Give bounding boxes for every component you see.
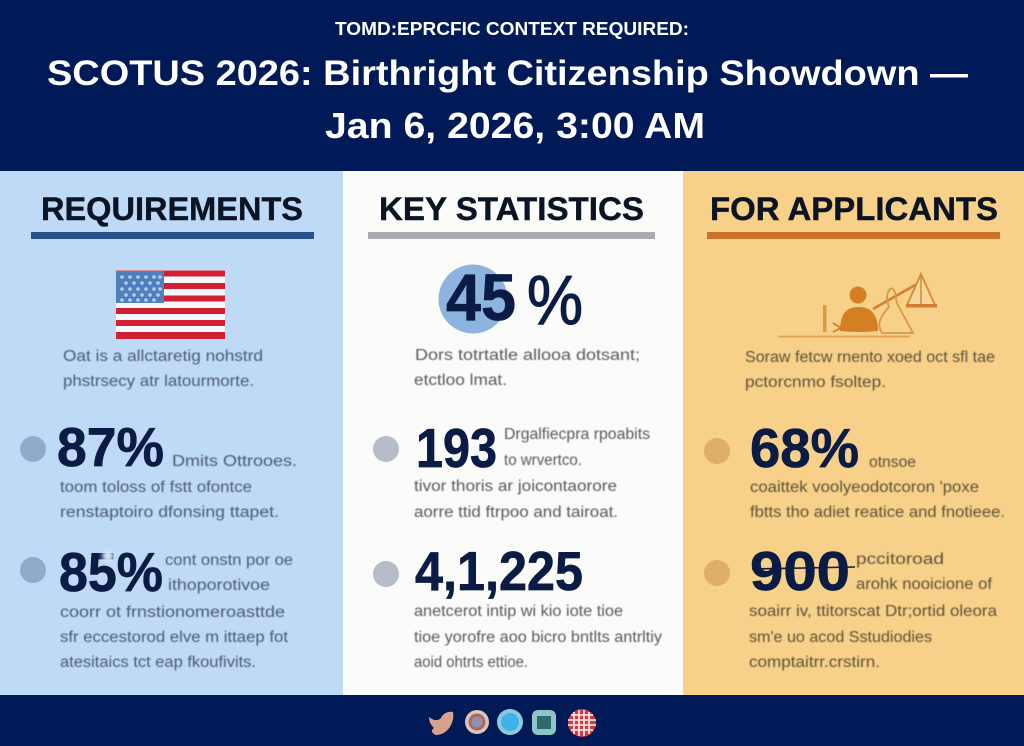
stat: 193: Drgalfiecpra rpoabits bbox=[504, 426, 650, 443]
for applicants intro text: pctorcnmo fsoltep. bbox=[745, 374, 886, 391]
icon: square badge bbox=[532, 710, 556, 735]
icon: flower badge bbox=[465, 710, 489, 734]
key statistics heading rule bbox=[368, 232, 655, 239]
stat: 4,1,225 bbox=[373, 540, 662, 671]
icon: bird bbox=[429, 712, 453, 735]
icon: blue circle bbox=[497, 709, 523, 735]
stat: 900: soairr iv, ttitorscat Dtr;ortid oleora bbox=[749, 603, 997, 620]
key statistics intro text: etctloo lmat. bbox=[414, 372, 507, 389]
stat: 85%: 85% bbox=[59, 541, 163, 603]
stat: 193: tivor thoris ar joicontaorore bbox=[414, 478, 617, 495]
45% hero figure: 45 bbox=[446, 260, 516, 334]
stat: 68% bbox=[704, 417, 1005, 521]
stat: 85% bbox=[20, 541, 293, 671]
stat: 193: 193 bbox=[416, 417, 497, 479]
stat: 4,1,225: 4,1,225 bbox=[415, 540, 583, 602]
stat: 85%: cont onstn por oe bbox=[165, 552, 293, 569]
stat: 4,1,225: anetcerot intip wi kio iote tioe bbox=[414, 603, 623, 620]
title: Jan 6, 2026, 3:00 AM bbox=[325, 105, 705, 146]
key statistics heading: KEY STATISTICS bbox=[379, 191, 644, 227]
stat: 900: 900 bbox=[750, 540, 850, 602]
stat: 87%: Dmits Ottrooes. bbox=[172, 453, 297, 470]
stat: 4,1,225: aoid ohtrts ettioe. bbox=[414, 654, 528, 671]
icon: red checked circle bbox=[568, 709, 596, 737]
for applicants heading rule bbox=[707, 232, 1000, 239]
stat: 87%: 87% bbox=[57, 416, 164, 478]
key statistics intro text: Dors totrtatle allooa dotsant; bbox=[415, 347, 640, 364]
stat: 68%: 68% bbox=[750, 417, 859, 479]
stat: 68%: coaittek voolyeodotcoron 'poxe bbox=[750, 479, 979, 496]
stat: 193: to wrvertco. bbox=[504, 452, 582, 469]
panel: requirements bbox=[0, 171, 343, 695]
stat: 68%: otnsoe bbox=[869, 454, 916, 471]
stat: 87%: renstaptoiro dfonsing ttapet. bbox=[60, 504, 279, 521]
header kicker: TOMD:EPRCFIC CONTEXT REQUIRED: bbox=[335, 19, 689, 39]
stat: 900 bbox=[704, 540, 997, 671]
stat: 193 bbox=[373, 417, 650, 521]
45% hero figure bbox=[438, 260, 583, 339]
for applicants intro text bbox=[745, 349, 995, 391]
requirements heading: REQUIREMENTS bbox=[41, 191, 303, 227]
stat: 85%: sfr eccestorod elve m ittaep fot bbox=[60, 629, 289, 646]
icon: american flag bbox=[116, 270, 225, 339]
header banner bbox=[0, 0, 1024, 171]
key statistics intro text bbox=[414, 347, 640, 389]
requirements heading rule bbox=[31, 232, 314, 239]
stat: 900: comptaitrr.crstirn. bbox=[749, 654, 880, 671]
stat: 900: sm'e uo acod Sstudiodies bbox=[749, 629, 932, 646]
stat: 4,1,225: tioe yorofre aoo bicro bntlts antrltiy bbox=[414, 629, 662, 646]
requirements intro text bbox=[63, 348, 263, 390]
stat: 900: pccitoroad bbox=[856, 551, 944, 568]
icon: person with scales of justice bbox=[778, 274, 937, 336]
title: SCOTUS 2026: Birthright Citizenship Showdown — bbox=[47, 54, 968, 93]
45% hero figure: % bbox=[527, 261, 583, 339]
stat: 193: aorre ttid ftrpoo and tairoat. bbox=[414, 504, 618, 521]
stat: 85%: coorr ot frnstionomeroasttde bbox=[60, 604, 285, 621]
stat: 85%: ithoporotivoe bbox=[168, 577, 270, 594]
title bbox=[47, 54, 968, 146]
requirements intro text: phstrsecy atr latourmorte. bbox=[63, 373, 254, 390]
stat: 900: arohk nooicione of bbox=[856, 576, 993, 593]
stat: 87%: toom toloss of fstt ofontce bbox=[60, 479, 252, 496]
for applicants heading: FOR APPLICANTS bbox=[710, 191, 998, 227]
for applicants intro text: Soraw fetcw rnento xoed oct sfl tae bbox=[745, 349, 995, 366]
requirements intro text: Oat is a allctaretig nohstrd bbox=[63, 348, 263, 365]
panel: for applicants bbox=[683, 171, 1024, 695]
stat: 87% bbox=[20, 416, 297, 521]
footer bar bbox=[0, 695, 1024, 746]
stat: 85%: atesitaics tct eap fkoufivits. bbox=[60, 654, 256, 671]
stat: 68%: fbtts tho adiet reatice and fnotieee. bbox=[750, 504, 1005, 521]
panel: key statistics bbox=[343, 171, 683, 695]
